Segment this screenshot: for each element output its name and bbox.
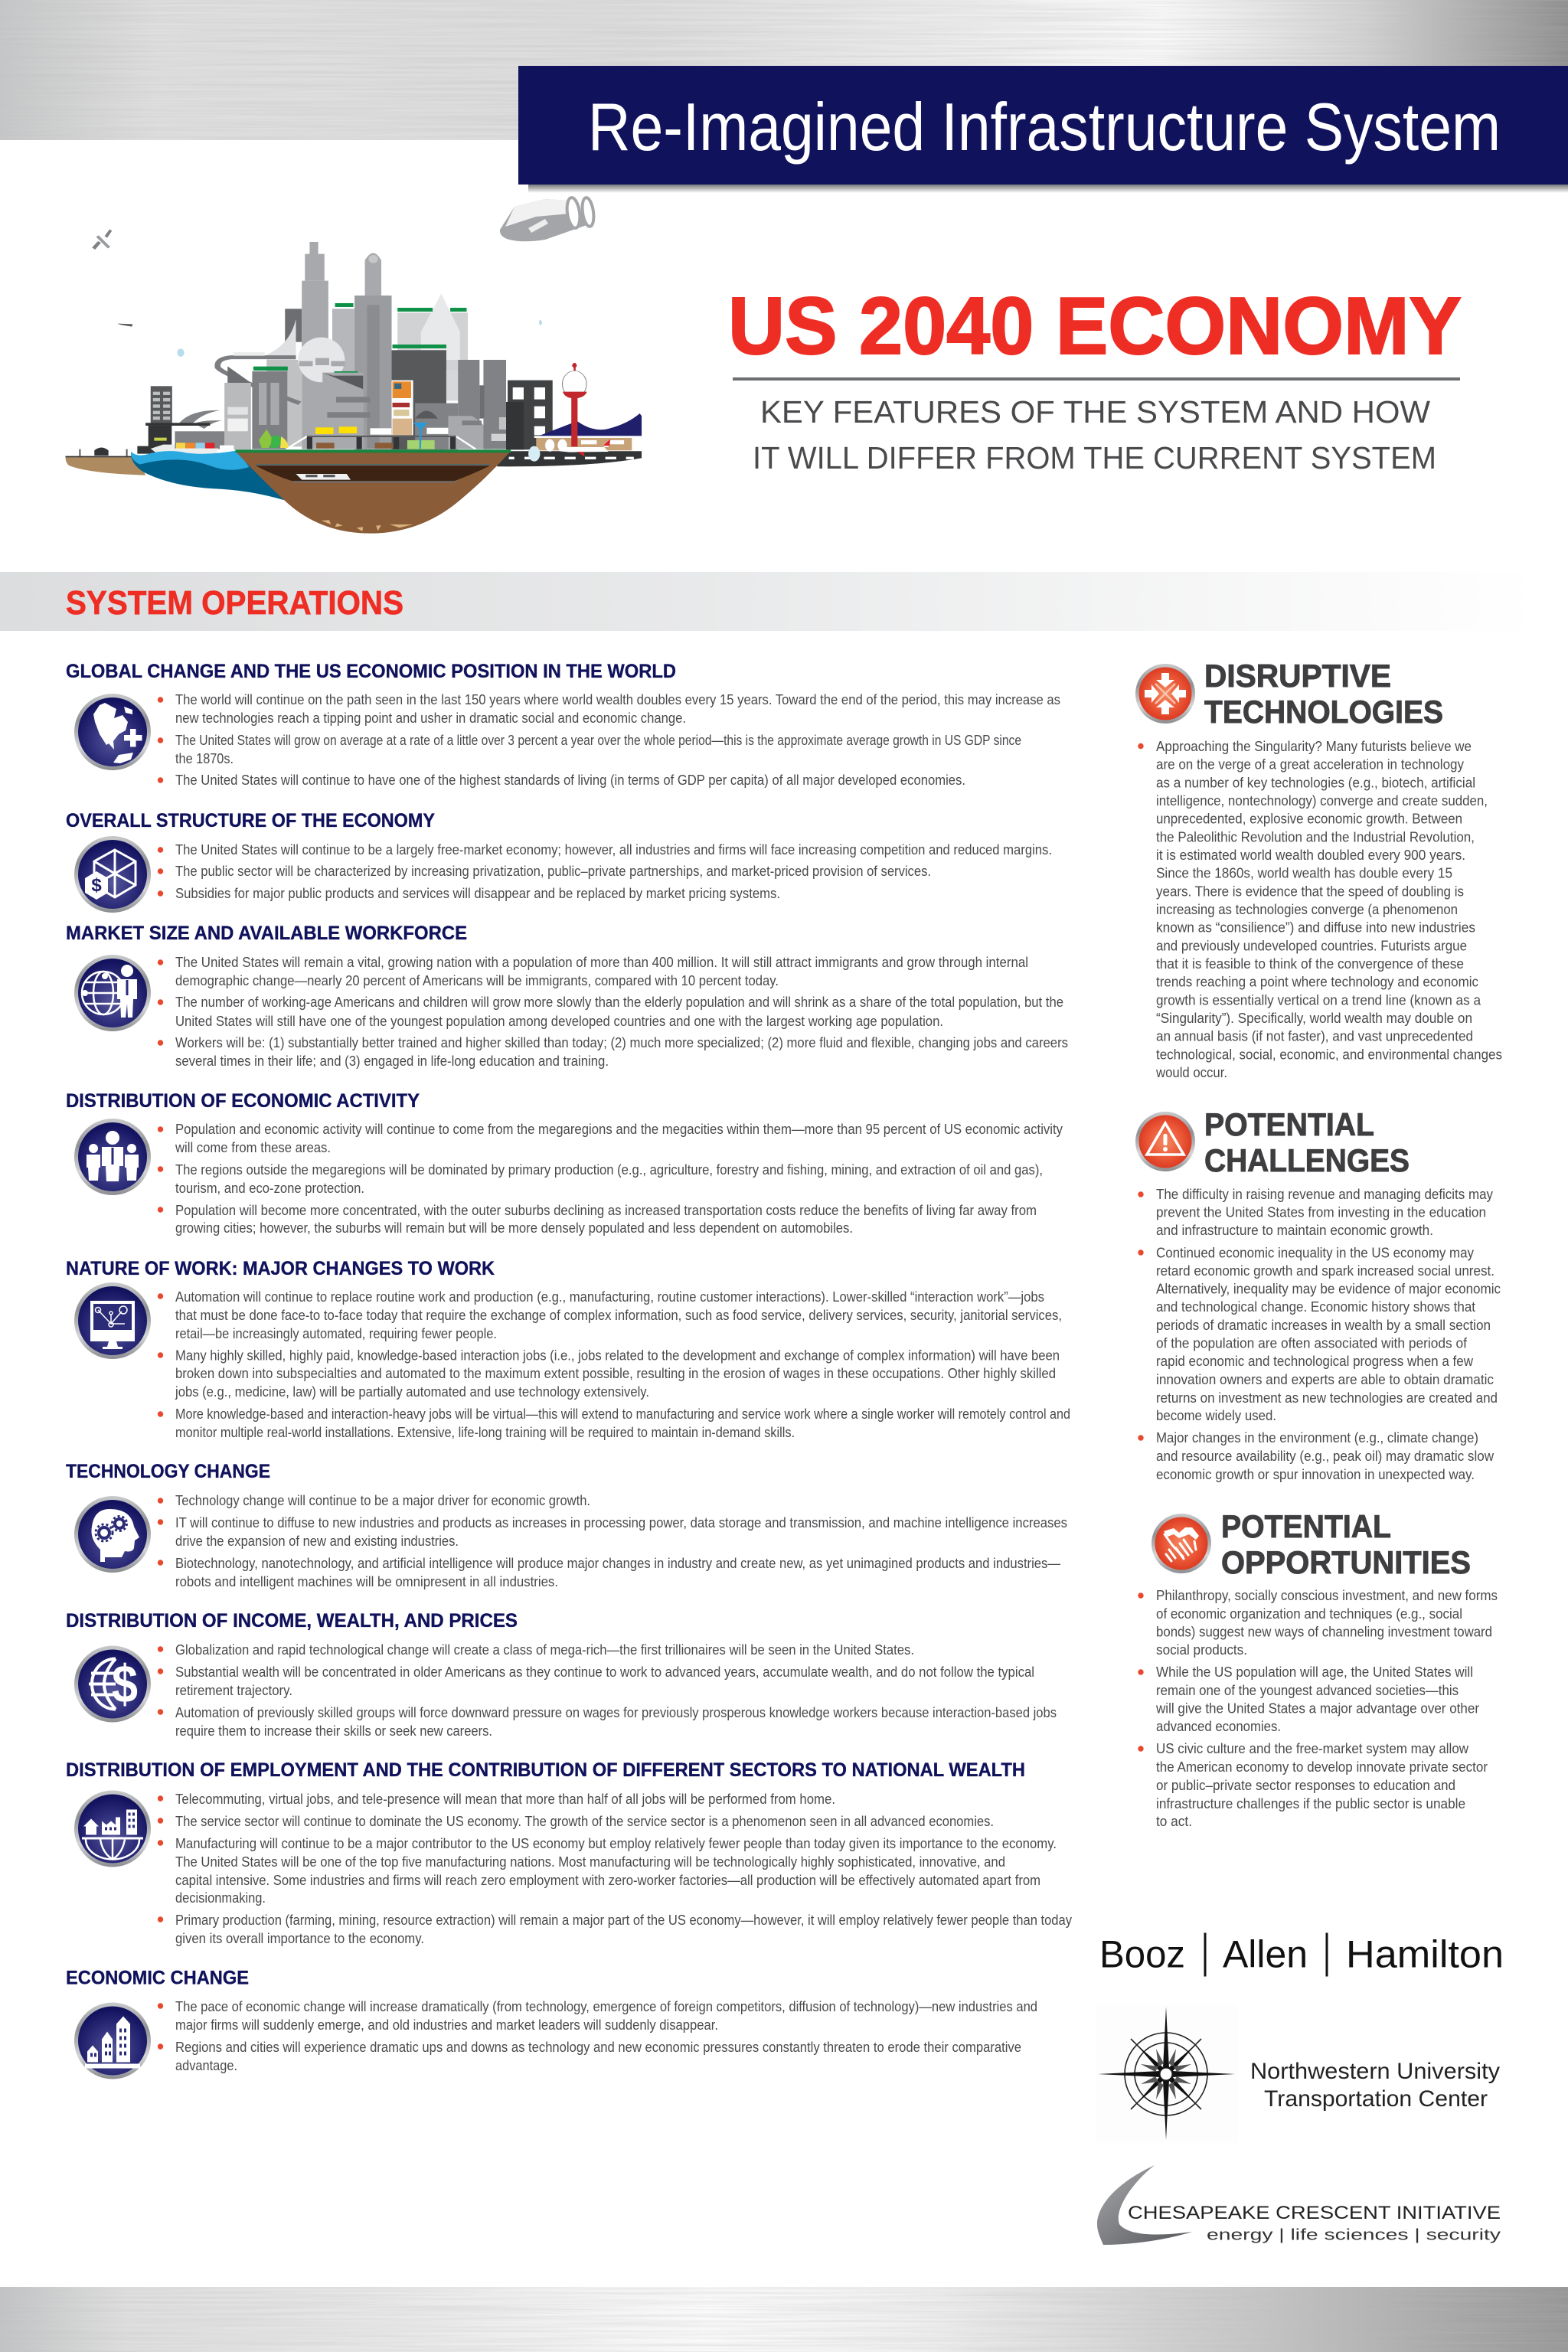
- bullets: [158, 692, 1060, 788]
- body text: to act.: [1156, 1814, 1192, 1829]
- section band: system operations: [0, 572, 1539, 631]
- body text: or public–private sector responses to education and: [1156, 1778, 1455, 1793]
- plaza: [286, 436, 475, 449]
- icon: compass rose: [1096, 2005, 1238, 2143]
- bullets: drive the expansion of new and existing industries.: [175, 1534, 459, 1549]
- icon: monitor: [74, 1282, 151, 1359]
- subtitle: KEY FEATURES OF THE SYSTEM AND HOW: [760, 394, 1430, 430]
- body text: of the population are often associated with periods of: [1156, 1335, 1468, 1351]
- bullets: Workers will be: (1) substantially better trained and higher skilled than today; (2) much more specialized; (2) more fluid and flexible, changing jobs and careers: [175, 1035, 1068, 1050]
- body text: prevent the United States from investing in the education: [1156, 1205, 1486, 1220]
- bullets: growing cities; however, the suburbs will remain but will be more densely populated and less dependent on automobiles.: [175, 1220, 853, 1236]
- body text: as a number of key technologies (e.g., biotech, artificial: [1156, 775, 1475, 790]
- body text: periods of dramatic increases in wealth by a small section: [1156, 1318, 1491, 1333]
- bullets: The United States will continue to be a largely free-market economy; however, all industries and firms will face increasing competition and reduced margins.: [175, 842, 1052, 858]
- body text: Continued economic inequality in the US economy may: [1156, 1245, 1474, 1260]
- bullets: Substantial wealth will be concentrated in older Americans as they continue to work to advanced years, accumulate wealth, and do not follow the typical: [175, 1664, 1034, 1680]
- bullets: monitor multiple real-world installations. Extensive, life-long training will be required to maintain in-demand skills.: [175, 1425, 795, 1440]
- body text: would occur.: [1155, 1065, 1227, 1080]
- bullets: [158, 955, 1068, 1069]
- body text: become widely used.: [1156, 1408, 1276, 1423]
- bullets: decisionmaking.: [175, 1890, 266, 1906]
- buildings back: [285, 309, 302, 342]
- body text: known as “consilience”) and diffuse into new industries: [1156, 920, 1475, 936]
- heading: POTENTIAL: [1221, 1508, 1391, 1544]
- heading: NATURE OF WORK: MAJOR CHANGES TO WORK: [66, 1258, 495, 1279]
- body text: and infrastructure to maintain economic growth.: [1156, 1223, 1433, 1238]
- icon: city over globe: [74, 1790, 151, 1867]
- logo: Booz Allen Hamilton: Hamilton: [1346, 1932, 1504, 1975]
- body text: Philanthropy, socially conscious investment, and new forms: [1156, 1588, 1498, 1603]
- bullets: [158, 1493, 1067, 1589]
- bullets: the 1870s.: [175, 751, 234, 766]
- body text: it is estimated world wealth doubled every 900 years.: [1156, 848, 1465, 863]
- icon: globe dollar: $: [112, 1654, 138, 1713]
- bullets: IT will continue to diffuse to new industries and products as increases in processing power, data storage and transmission, and machine intelligence increases: [175, 1515, 1067, 1530]
- body text: that it is feasible to think of the convergence of these: [1156, 956, 1464, 972]
- logo: Northwestern University Transportation Center: [1096, 2005, 1500, 2143]
- logo: Booz Allen Hamilton: Allen: [1223, 1932, 1308, 1975]
- body text: bonds) suggest new ways of channeling investment toward: [1156, 1625, 1492, 1640]
- bullets: Regions and cities will experience dramatic ups and downs as technology and new economic pressures constantly threaten to erode their comparative: [175, 2040, 1021, 2055]
- bullets: The United States will remain a vital, growing nation with a population of more than 400 million. It will still attract immigrants and grow through internal: [175, 955, 1028, 970]
- bullets: that must be done face-to to-face today that require the exchange of complex information, such as food service, delivery services, security, janitorial services,: [175, 1308, 1062, 1323]
- heading: POTENTIAL: [1204, 1106, 1374, 1142]
- bullets: Population will become more concentrated, with the outer suburbs declining as increased transportation costs reduce the benefits of living far away from: [175, 1203, 1037, 1218]
- navy roof terminal: [536, 438, 632, 450]
- bullets: Biotechnology, nanotechnology, and artificial intelligence will produce major changes in industry and create new, as yet unimagined products and industries—: [175, 1556, 1060, 1571]
- heading: [1204, 1106, 1410, 1178]
- body text: the American economy to develop innovate private sector: [1156, 1759, 1488, 1775]
- bullets: Subsidies for major public products and services will disappear and be replaced by market pricing systems.: [175, 886, 780, 901]
- city illustration: [66, 197, 642, 534]
- bullets: advantage.: [175, 2058, 237, 2073]
- bullets: The world will continue on the path seen in the last 150 years where world wealth doubles every 15 years. Toward the end of the period, this may increase as: [175, 692, 1060, 707]
- road: [495, 451, 642, 466]
- body text: retard economic growth and spark increased social unrest.: [1156, 1263, 1494, 1279]
- bullets: given its overall importance to the economy.: [175, 1931, 424, 1946]
- subtitle: IT WILL DIFFER FROM THE CURRENT SYSTEM: [753, 440, 1436, 475]
- body text: advanced economies.: [1156, 1719, 1281, 1734]
- bullets: The United States will continue to have one of the highest standards of living (in terms of GDP per capita) of all major developed economies.: [175, 773, 965, 788]
- bullets: The service sector will continue to dominate the US economy. The growth of the service sector is a phenomenon seen in all advanced economies.: [175, 1814, 994, 1829]
- heading: TECHNOLOGY CHANGE: [66, 1461, 270, 1482]
- panel: employment and sectors: [66, 1759, 1072, 1946]
- body text: Major changes in the environment (e.g., climate change): [1156, 1430, 1478, 1446]
- body text: and technological change. Economic history shows that: [1156, 1299, 1475, 1315]
- icon: cube with dollar: [74, 836, 151, 913]
- panel: distribution of economic activity: [66, 1090, 1063, 1236]
- bullets: The United States will grow on average at a rate of a little over 3 percent a year over the whole period—this is the approximate average growth in US GDP since: [175, 733, 1021, 748]
- bullets: new technologies reach a tipping point and usher in dramatic social and economic change.: [175, 710, 686, 726]
- body text: unprecedented, explosive economic growth. Between: [1156, 812, 1462, 827]
- left port: [151, 386, 172, 424]
- icon: cube with dollar: $: [91, 875, 102, 896]
- bullets: robots and intelligent machines will be omnipresent in all industries.: [175, 1574, 558, 1589]
- body text: US civic culture and the free-market system may allow: [1156, 1741, 1469, 1756]
- bullets: Automation of previously skilled groups will force downward pressure on wages for previously prosperous knowledge workers because interaction-based jobs: [175, 1705, 1057, 1720]
- body text: are on the verge of a great acceleration in technology: [1156, 757, 1464, 773]
- body text: technological, social, economic, and environmental changes: [1156, 1047, 1502, 1062]
- heading: GLOBAL CHANGE AND THE US ECONOMIC POSITION IN THE WORLD: [66, 661, 676, 682]
- heading: CHALLENGES: [1204, 1142, 1410, 1178]
- organization name: Northwestern University: [1250, 2059, 1500, 2084]
- bullets: Globalization and rapid technological change will create a class of mega-rich—the first trillionaires will be seen in the United States.: [175, 1642, 914, 1658]
- footer steel band: [0, 2287, 1568, 2352]
- subtitle: [753, 394, 1436, 475]
- dark building: [508, 381, 553, 449]
- body text: [1138, 1187, 1501, 1482]
- bullets: [158, 1999, 1037, 2073]
- body text: remain one of the youngest advanced societies—this: [1156, 1683, 1459, 1698]
- logo: Chesapeake Crescent Initiative: [1097, 2165, 1501, 2245]
- body text: growth is essentially vertical on a trend line (known as a: [1156, 992, 1481, 1008]
- bullets: demographic change—nearly 20 percent of Americans will be immigrants, compared with 10 percent today.: [175, 973, 779, 988]
- bullets: jobs (e.g., medicine, law) will be partially automated and use technology extensively.: [175, 1384, 649, 1400]
- bullets: capital intensive. Some industries and firms will reach zero employment with zero-worker factories—all production will be effectively automated apart from: [175, 1873, 1040, 1888]
- panel: disruptive technologies: [1135, 658, 1502, 1080]
- logo: Booz Allen Hamilton: Booz: [1099, 1932, 1185, 1975]
- main heading: US 2040 ECONOMY: [728, 281, 1462, 371]
- header steel band: [0, 0, 1568, 140]
- heading: [1221, 1508, 1471, 1580]
- body text: infrastructure challenges if the public sector is unable: [1156, 1796, 1465, 1811]
- organization name: Transportation Center: [1264, 2086, 1488, 2112]
- body text: social products.: [1156, 1642, 1247, 1658]
- logo: Booz Allen Hamilton: [1099, 1932, 1504, 1977]
- body text: innovation owners and experts are able to obtain dramatic: [1156, 1372, 1494, 1387]
- colour building: [392, 381, 413, 435]
- panel: potential opportunities: [1138, 1508, 1498, 1829]
- icon: warning triangle: [1135, 1112, 1195, 1171]
- bullets: Population and economic activity will continue to come from the megaregions and the megacities within them—more than 95 percent of US economic activity: [175, 1122, 1063, 1137]
- icon: globe dollar: [74, 1646, 151, 1723]
- body text: While the US population will age, the United States will: [1156, 1664, 1473, 1680]
- panel: market size: [66, 923, 1068, 1069]
- greens: [253, 303, 466, 374]
- ground bowl: [235, 451, 511, 534]
- body text: rapid economic and technological progress when a few: [1156, 1354, 1474, 1369]
- body text: [1138, 1588, 1498, 1829]
- heading: MARKET SIZE AND AVAILABLE WORKFORCE: [66, 923, 467, 944]
- bullets: retirement trajectory.: [175, 1683, 292, 1698]
- heading: DISRUPTIVE: [1204, 658, 1391, 694]
- panel: income wealth prices: [66, 1610, 1057, 1739]
- body text: The difficulty in raising revenue and managing deficits may: [1156, 1187, 1493, 1202]
- bullets: retail—be increasingly automated, requiring fewer people.: [175, 1326, 497, 1341]
- bullets: Primary production (farming, mining, resource extraction) will remain a major part of the US economy—however, it will employ relatively fewer people than today: [175, 1913, 1072, 1928]
- body text: Approaching the Singularity? Many futurists believe we: [1156, 739, 1472, 754]
- bullets: several times in their life; and (3) engaged in life-long education and training.: [175, 1054, 609, 1069]
- tagline: energy | life sciences | security: [1207, 2226, 1501, 2243]
- body text: and resource availability (e.g., peak oil) may dramatic slow: [1156, 1449, 1494, 1464]
- body text: increasing as technologies converge (a phenomenon: [1156, 902, 1458, 917]
- bullets: [158, 842, 1052, 901]
- main tower: [364, 253, 382, 296]
- section band: system operations: SYSTEM OPERATIONS: [66, 584, 403, 622]
- heading: TECHNOLOGIES: [1204, 694, 1443, 730]
- bullets: broken down into subspecialties and automated to the maximum extent possible, resulting in the erosion of wages in these occupations. Other highly skilled: [175, 1366, 1056, 1381]
- icon: globe plus: [74, 694, 151, 770]
- water: [131, 452, 284, 500]
- body text: and previously undeveloped countries. Futurists argue: [1156, 938, 1467, 953]
- body text: Since the 1860s, world wealth has double every 15: [1156, 866, 1452, 881]
- body text: will give the United States a major advantage over other: [1155, 1701, 1479, 1717]
- panel: nature of work: [66, 1258, 1070, 1440]
- body text: Alternatively, inequality may be evidence of major economic: [1156, 1282, 1501, 1297]
- icon: group of people: [74, 1119, 151, 1195]
- icon: handshake: [1152, 1514, 1211, 1573]
- heading: OVERALL STRUCTURE OF THE ECONOMY: [66, 810, 435, 831]
- icon: crescent: [1097, 2165, 1192, 2245]
- bullets: The pace of economic change will increase dramatically (from technology, emergence of foreign competitors, diffusion of technology)—new industries and: [175, 1999, 1037, 2014]
- left block: [227, 366, 251, 383]
- bullets: [158, 1792, 1072, 1946]
- left sand: [66, 457, 145, 475]
- panel: technology change: [66, 1461, 1067, 1589]
- heading: [1204, 658, 1443, 730]
- bullets: The public sector will be characterized by increasing privatization, public–private partnerships, and market-priced provision of services.: [175, 864, 931, 879]
- bullets: [158, 1122, 1063, 1236]
- bullets: Technology change will continue to be a major driver for economic growth.: [175, 1493, 590, 1508]
- icon: buildings: [74, 2003, 151, 2079]
- bullets: major firms will suddenly emerge, and old industries and market leaders will suddenly disappear.: [175, 2017, 718, 2033]
- bullets: [158, 1642, 1057, 1739]
- icon: pod: [500, 197, 596, 241]
- body text: intelligence, nontechnology) converge and create sudden,: [1156, 793, 1488, 808]
- body text: trends reaching a point where technology and economic: [1156, 975, 1478, 990]
- bullets: require them to increase their skills or seek new careers.: [175, 1723, 492, 1739]
- center block: [322, 373, 364, 449]
- body text: economic growth or spur innovation in unexpected way.: [1156, 1467, 1475, 1482]
- icon: globe and worker: [74, 955, 151, 1031]
- icon: converging arrows: [1135, 664, 1195, 724]
- bullets: United States will still have one of the youngest population among developed countries and one with the largest working age population.: [175, 1014, 943, 1029]
- body text: “Singularity”). Specifically, world wealth may double on: [1156, 1011, 1472, 1026]
- panel: economic change: [66, 1968, 1037, 2079]
- body text: of economic organization and techniques (e.g., social: [1156, 1606, 1462, 1622]
- bullets: More knowledge-based and interaction-heavy jobs will be virtual—this will extend to manufacturing and service work where a single worker will remotely control and: [175, 1406, 1070, 1422]
- bullets: Telecommuting, virtual jobs, and tele-presence will mean that more than half of all jobs will be performed from home.: [175, 1792, 835, 1807]
- panel: global change: [66, 661, 1060, 788]
- body text: years. There is evidence that the speed of doubling is: [1156, 884, 1464, 899]
- road ramp: [217, 358, 300, 403]
- right blocks: [415, 403, 458, 449]
- organization name: CHESAPEAKE CRESCENT INITIATIVE: [1128, 2203, 1501, 2223]
- bullets: Automation will continue to replace routine work and production (e.g., manufacturing, routine customer interactions). Lower-skilled “interaction work”—jobs: [175, 1289, 1044, 1305]
- body text: [1138, 739, 1502, 1080]
- bullets: The United States will be one of the top five manufacturing nations. Most manufacturing will be technologically highly sophisticated, innovative, and: [175, 1854, 1005, 1870]
- bullets: The number of working-age Americans and children will grow more slowly than the elderly population and will shrink as a share of the total population, but the: [175, 995, 1063, 1010]
- icon: head with gears: [74, 1496, 151, 1573]
- heading: ECONOMIC CHANGE: [66, 1968, 249, 1989]
- heading: OPPORTUNITIES: [1221, 1544, 1471, 1580]
- body text: returns on investment as new technologies are created and: [1156, 1390, 1498, 1406]
- bullets: tourism, and eco-zone protection.: [175, 1181, 364, 1196]
- bullets: Many highly skilled, highly paid, knowledge-based interaction jobs (i.e., jobs related to the development and exchange of complex information) will have been: [175, 1348, 1060, 1363]
- bullets: The regions outside the megaregions will be dominated by primary production (e.g., agriculture, forestry and fishing, mining, and extraction of oil and gas),: [175, 1162, 1043, 1178]
- body text: the Paleolithic Revolution and the Industrial Revolution,: [1156, 829, 1475, 844]
- heading: DISTRIBUTION OF EMPLOYMENT AND THE CONTRIBUTION OF DIFFERENT SECTORS TO NATIONAL WEALTH: [66, 1759, 1025, 1781]
- body text: an annual basis (if not faster), and vast unprecedented: [1156, 1029, 1473, 1044]
- panel: potential challenges: [1135, 1106, 1501, 1482]
- title banner: [518, 66, 1568, 193]
- heading: DISTRIBUTION OF INCOME, WEALTH, AND PRICES: [66, 1610, 518, 1632]
- panel: overall structure: [66, 810, 1052, 913]
- bullets: Manufacturing will continue to be a major contributor to the US economy but employ relatively fewer people than today given its importance to the economy.: [175, 1836, 1057, 1851]
- red tower: [573, 363, 576, 376]
- bullets: will come from these areas.: [175, 1140, 331, 1155]
- heading: DISTRIBUTION OF ECONOMIC ACTIVITY: [66, 1090, 420, 1112]
- bullets: [158, 1289, 1070, 1440]
- organization name: [1250, 2059, 1500, 2112]
